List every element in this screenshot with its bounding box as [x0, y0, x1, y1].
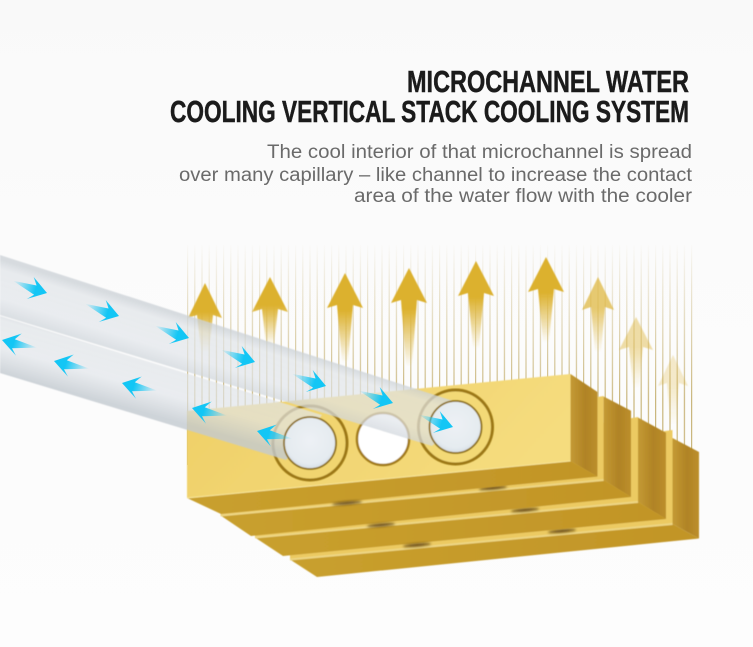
arrow 7 — [582, 277, 614, 352]
plate 1 — [187, 374, 598, 514]
arrow 1 — [188, 283, 222, 352]
lower pipe — [0, 316, 322, 460]
heat-sink fins — [187, 245, 695, 465]
plate 3 — [255, 417, 666, 556]
port water left — [284, 417, 336, 469]
port rings and middle port — [273, 390, 492, 480]
heat arrows rising from the block — [188, 257, 688, 425]
flow arrows lower pipe — [0, 329, 295, 452]
arrow 8 — [619, 317, 653, 388]
arrow 3 — [327, 273, 363, 362]
flow arrows upper pipe — [9, 272, 456, 438]
description text: area of the water flow with the cooler — [354, 186, 693, 207]
port ring left — [273, 406, 347, 480]
upper pipe — [0, 255, 472, 446]
port water right — [430, 401, 482, 453]
port ring right — [418, 390, 492, 464]
port middle — [357, 413, 409, 465]
plate 2 — [221, 396, 631, 536]
arrow 9 — [658, 355, 688, 425]
arrow 6 — [528, 257, 564, 342]
description text — [179, 142, 693, 207]
title — [170, 64, 689, 129]
coolant pipes — [0, 255, 482, 469]
arrow 4 — [391, 268, 427, 366]
infographic canvas — [0, 70, 700, 578]
plate 4 — [290, 430, 699, 577]
description text: over many capillary – like channel to increase the contact — [179, 165, 693, 186]
arrow 2 — [252, 277, 288, 345]
gold cooling block stack — [187, 374, 699, 577]
description text: The cool interior of that microchannel is spread — [267, 142, 692, 163]
arrow 5 — [458, 261, 494, 348]
